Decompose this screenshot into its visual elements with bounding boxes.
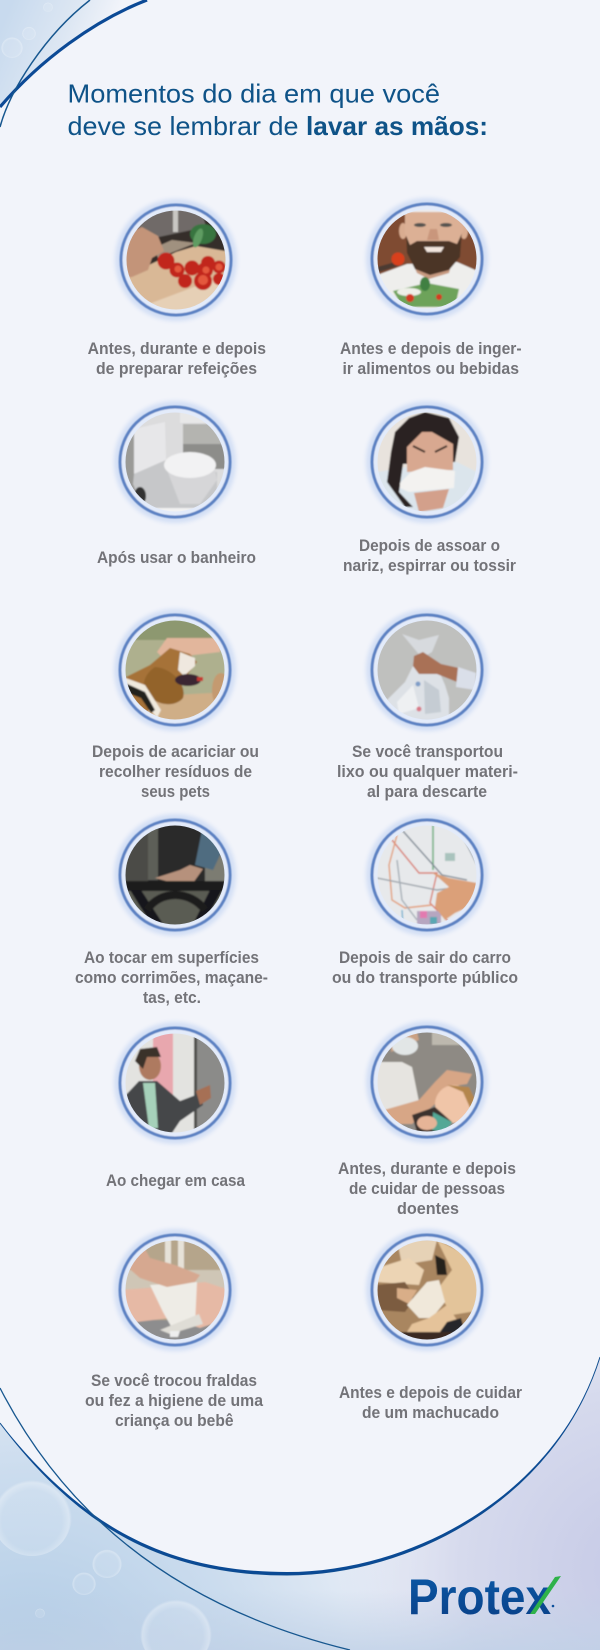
caption <box>85 1372 264 1430</box>
decoration: bottom water background with curves <box>0 1340 600 1650</box>
icon: ring with bandaged ankle photo <box>366 1229 488 1351</box>
caption: de preparar refeições <box>96 360 257 378</box>
caption: ou do transporte público <box>332 969 518 987</box>
caption: como corrimões, maçane- <box>75 969 268 987</box>
icon: ring with transit map photo <box>366 814 488 936</box>
caption: Antes e depois de inger- <box>340 340 522 358</box>
icon: ring with hand on railing photo <box>114 814 236 936</box>
panel: preparar refeições <box>88 199 266 378</box>
caption <box>88 340 266 378</box>
panel: cuidar de pessoas doentes <box>338 1021 516 1218</box>
caption: Antes e depois de cuidar <box>339 1384 523 1402</box>
caption: recolher resíduos de <box>99 763 252 781</box>
caption: Após usar o banheiro <box>97 549 256 567</box>
icon: ring with dog photo <box>114 609 236 731</box>
panel: trocar fraldas <box>85 1229 264 1430</box>
title <box>68 78 488 141</box>
icon: ring with toilet photo <box>114 401 236 523</box>
panel: ingerir alimentos <box>340 198 522 378</box>
caption: Antes, durante e depois <box>88 340 266 358</box>
icon: ring with trash bag photo <box>366 609 488 731</box>
panel: chegar em casa <box>106 1022 246 1190</box>
caption: ou fez a higiene de uma <box>85 1392 264 1410</box>
icon: ring with man at door photo <box>114 1022 236 1144</box>
panel: tocar superfícies <box>75 814 268 1007</box>
caption: Antes, durante e depois <box>338 1160 516 1178</box>
icon: ring with man and salad photo <box>366 198 488 320</box>
caption: tas, etc. <box>143 989 201 1007</box>
caption <box>337 743 518 801</box>
panel: acariciar pets <box>92 609 259 801</box>
panel: sair do carro ou transporte <box>332 814 518 987</box>
caption: Ao chegar em casa <box>106 1172 246 1190</box>
caption <box>339 1384 523 1422</box>
caption: Depois de assoar o <box>359 537 500 555</box>
caption <box>75 949 268 1007</box>
panel: transportar lixo <box>337 609 518 801</box>
panel: cuidar de machucado <box>339 1229 523 1422</box>
panel: assoar o nariz <box>343 401 517 575</box>
icon: ring with tomatoes photo <box>115 199 237 321</box>
icon: ring with sick child photo <box>366 1021 488 1143</box>
caption <box>338 1160 516 1218</box>
title: lavar as mãos: <box>306 111 488 141</box>
caption: seus pets <box>141 783 210 801</box>
caption: Depois de acariciar ou <box>92 743 259 761</box>
caption <box>343 537 517 575</box>
decoration: top-left water corner <box>0 0 147 127</box>
caption <box>332 949 518 987</box>
title: deve se lembrar de <box>68 111 298 141</box>
icon: ring with diaper change photo <box>114 1229 236 1351</box>
caption: criança ou bebê <box>115 1412 234 1430</box>
caption: al para descarte <box>367 783 487 801</box>
caption: Se você trocou fraldas <box>91 1372 257 1390</box>
caption: de um machucado <box>362 1404 499 1422</box>
title: Momentos do dia em que você <box>68 78 440 108</box>
caption: lixo ou qualquer materi- <box>337 763 518 781</box>
caption <box>92 743 259 801</box>
caption: de cuidar de pessoas <box>349 1180 505 1198</box>
logo: Protex: Protex <box>408 1569 551 1625</box>
caption: ir alimentos ou bebidas <box>342 360 519 378</box>
caption <box>340 340 522 378</box>
icon: ring with sneezing woman photo <box>366 401 488 523</box>
caption: Ao tocar em superfícies <box>84 949 259 967</box>
panel: usar o banheiro <box>97 401 256 567</box>
caption: doentes <box>397 1200 459 1218</box>
caption: Depois de sair do carro <box>339 949 511 967</box>
caption: Se você transportou <box>352 743 503 761</box>
caption: nariz, espirrar ou tossir <box>343 557 517 575</box>
